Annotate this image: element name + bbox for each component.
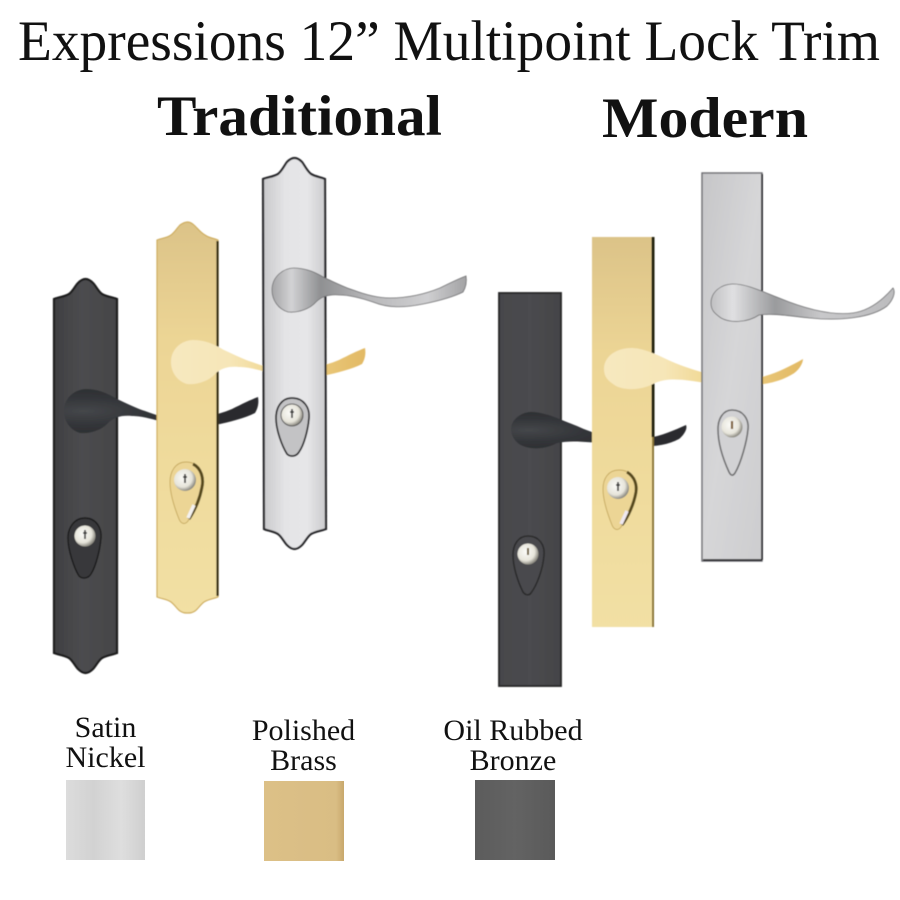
swatch: oil rubbed bronze [475,780,555,860]
modern trim group [499,173,894,686]
swatch: polished brass [264,781,344,861]
label: Polished Brass: Polished [252,714,355,747]
oil rubbed bronze modern handle [511,412,686,448]
oil rubbed bronze traditional plate [54,279,117,673]
polished brass modern plate [592,237,654,627]
label: Polished Brass: Brass [270,744,337,777]
satin nickel modern handle [711,284,894,321]
heading: Modern: Modern [602,87,808,150]
heading: Traditional: Traditional [157,85,442,148]
polished brass traditional plate [157,222,218,613]
finish: polished brass [252,714,355,861]
satin nickel modern plate [702,173,762,561]
satin nickel traditional handle [272,268,466,312]
oil rubbed bronze modern plate [499,293,561,686]
finish: oil rubbed bronze [443,714,583,860]
label: Satin Nickel: Nickel [66,741,145,774]
oil rubbed bronze traditional handle [64,389,258,433]
traditional trim group [54,158,466,673]
label: Oil Rubbed Bronze: Bronze [470,744,556,777]
swatch: satin nickel [66,780,145,860]
polished brass traditional handle [171,340,365,384]
label: Oil Rubbed Bronze: Oil Rubbed [443,714,583,747]
polished brass modern handle [604,348,803,389]
satin nickel traditional plate [263,158,326,549]
finish: satin nickel [66,711,145,860]
label: Satin Nickel: Satin [75,711,136,744]
title: Expressions 12” Multipoint Lock Trim [18,10,880,73]
